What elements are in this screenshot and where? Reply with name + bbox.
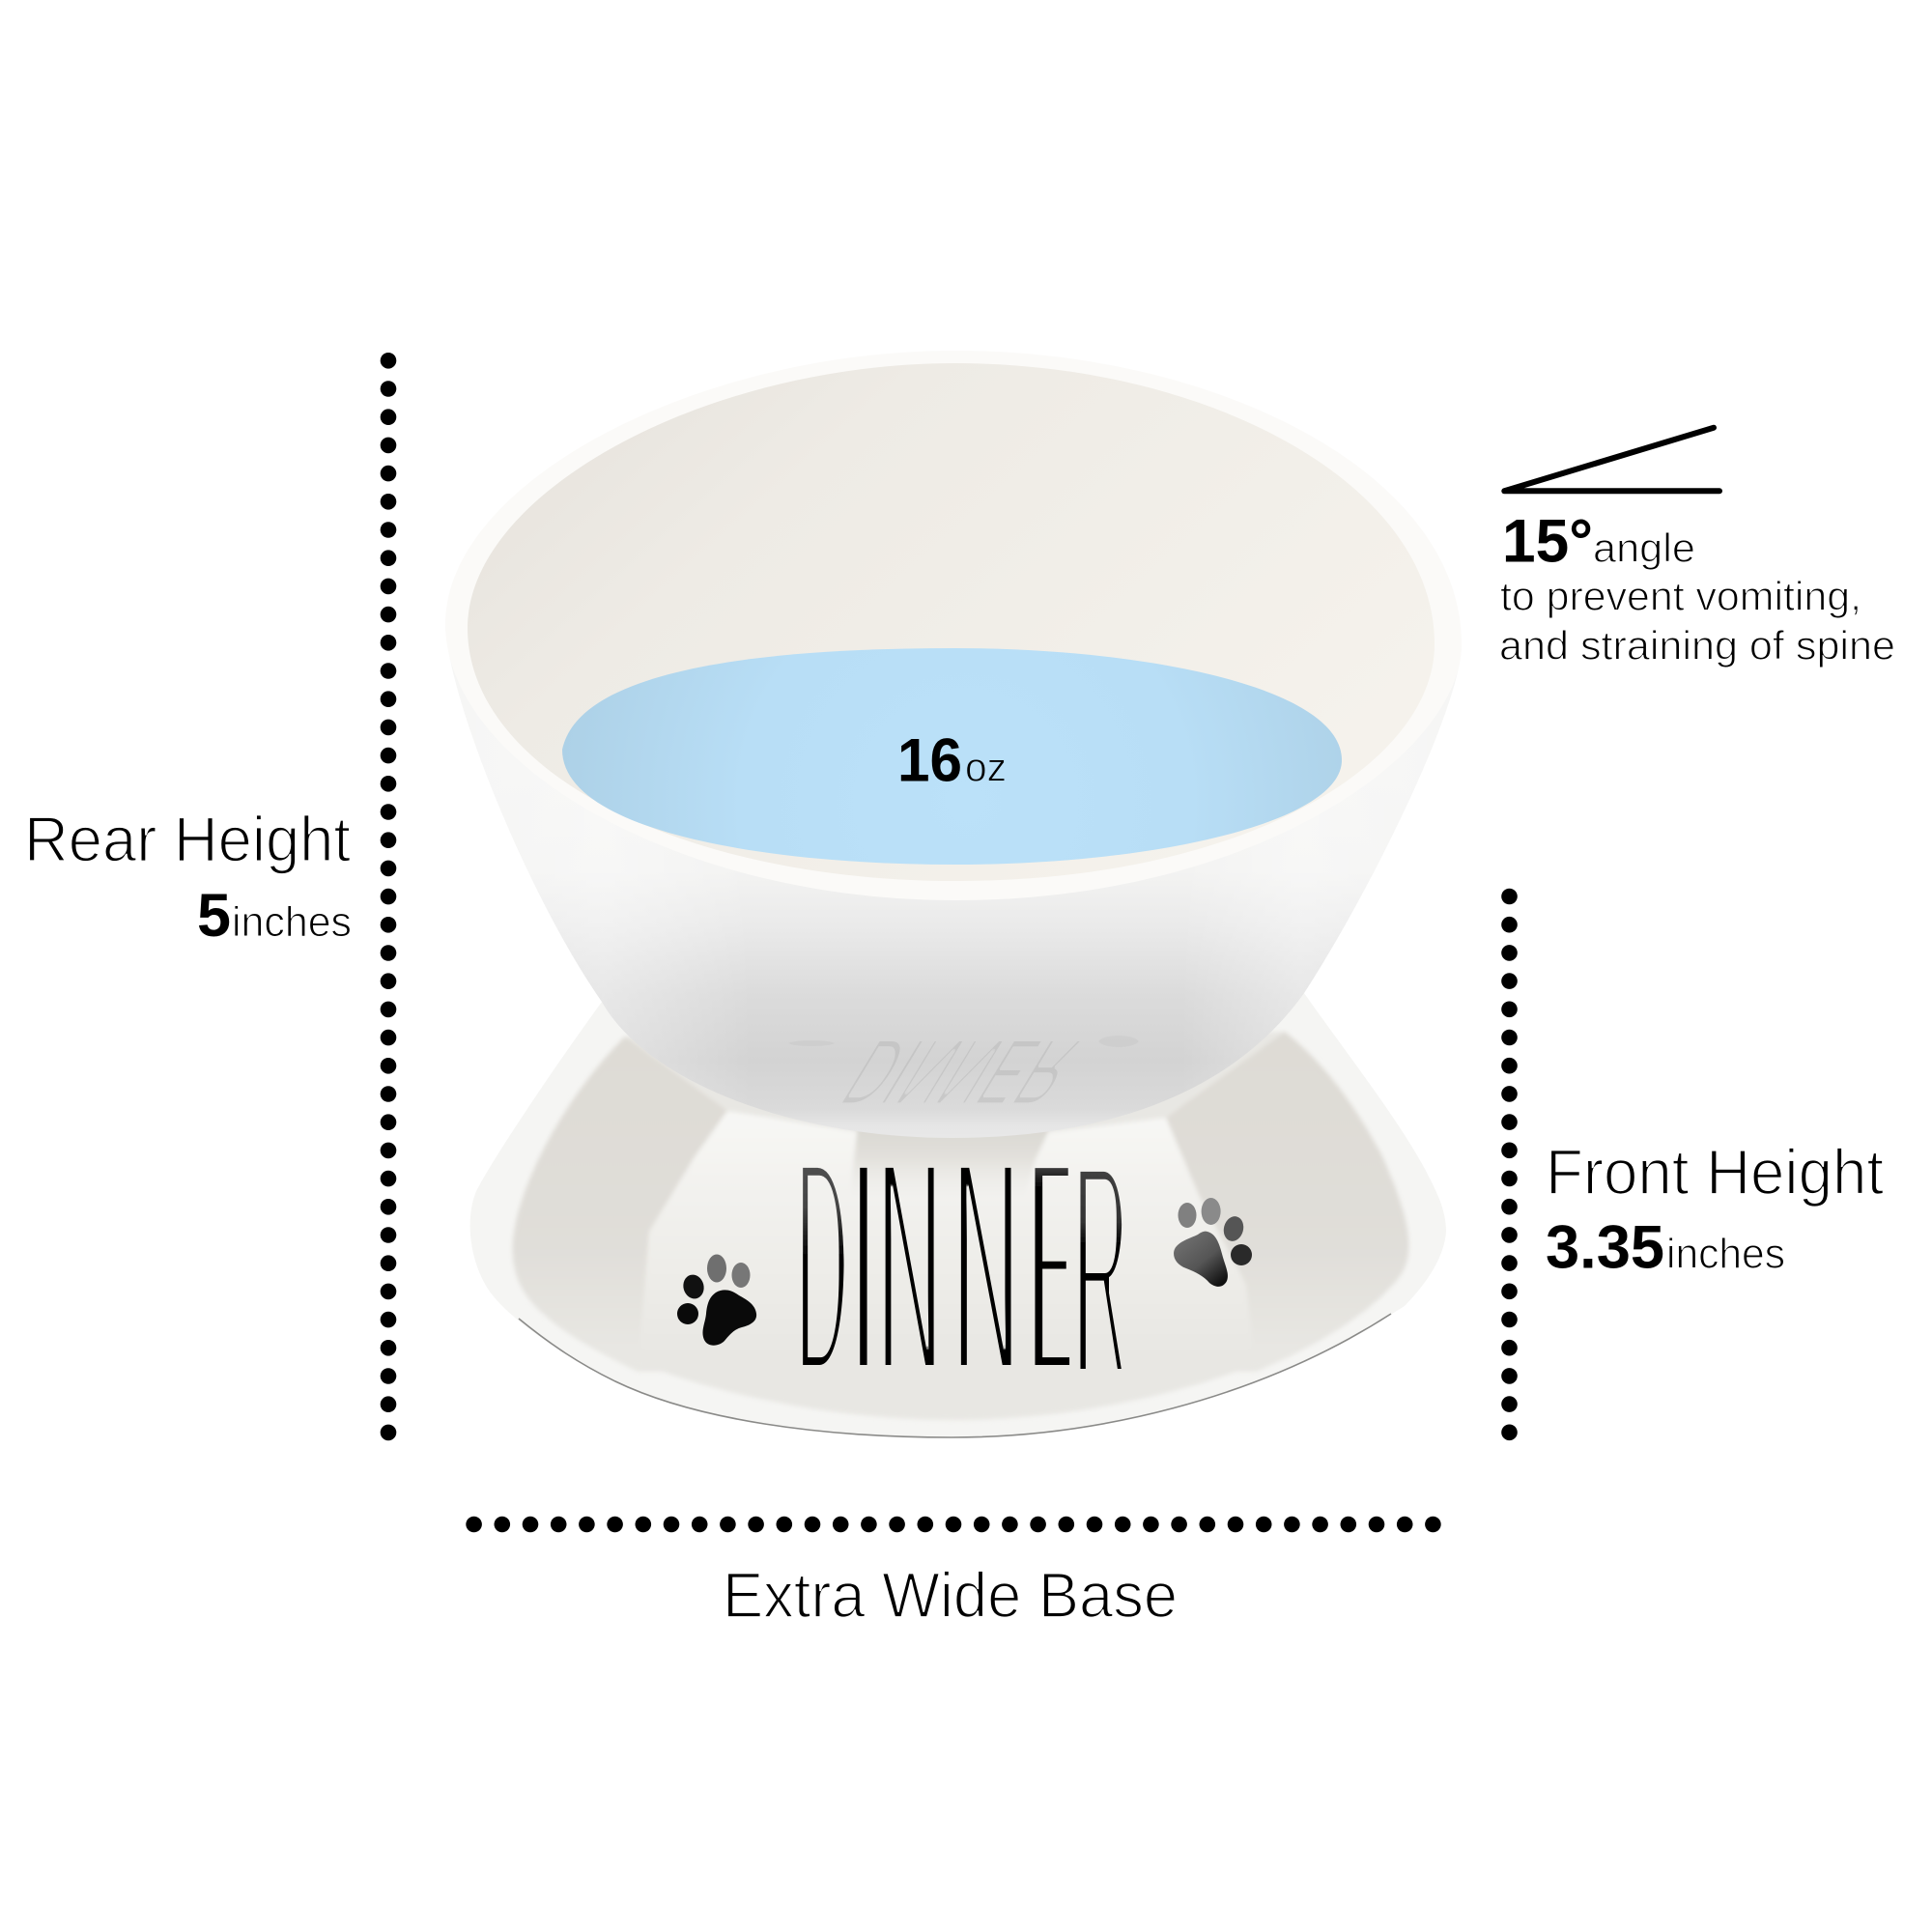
bowl rim [445, 351, 1462, 900]
front height label: 3.35 [1546, 1214, 1664, 1282]
rear height label [24, 804, 352, 950]
DINNER lettering: I [850, 1094, 877, 1439]
front height dotted line [1501, 896, 1518, 1433]
icon: left paw print [677, 1254, 756, 1346]
capacity label: 16 [897, 726, 962, 794]
DINNER lettering: D [796, 1094, 848, 1439]
front height label [1546, 1136, 1884, 1282]
DINNER lettering: N [952, 1094, 1019, 1439]
bowl body [445, 624, 1462, 1138]
DINNER lettering: N [877, 1094, 942, 1438]
angle note: 15° [1502, 508, 1593, 576]
front height label: Front Height [1546, 1136, 1884, 1208]
DINNER lettering [796, 1082, 1128, 1449]
bowl illustration [445, 351, 1462, 1449]
DINNER lettering: R [1073, 1098, 1128, 1443]
angle note: and straining of spine [1499, 622, 1895, 668]
angle note: to prevent vomiting, [1500, 574, 1861, 619]
icon: right paw print [1174, 1198, 1252, 1287]
water fill [562, 648, 1342, 865]
angle note: angle [1593, 526, 1695, 571]
DINNER lettering: E [1030, 1082, 1073, 1449]
bowl base [470, 993, 1446, 1437]
front height label: inches [1666, 1231, 1785, 1278]
rear height label: inches [232, 898, 352, 946]
faint reflection of the lettering [786, 1021, 1140, 1123]
icon: 15 degree angle [1504, 428, 1719, 491]
base width dotted line [474, 1517, 1434, 1532]
capacity label: oz [965, 744, 1007, 789]
rear height label: Rear Height [24, 804, 351, 875]
capacity label [897, 726, 1007, 794]
base width label: Extra Wide Base [723, 1559, 1178, 1631]
angle note [1499, 508, 1895, 668]
bowl interior [468, 363, 1435, 881]
rear height dotted line [381, 360, 396, 1433]
rear height label: 5 [197, 882, 231, 950]
